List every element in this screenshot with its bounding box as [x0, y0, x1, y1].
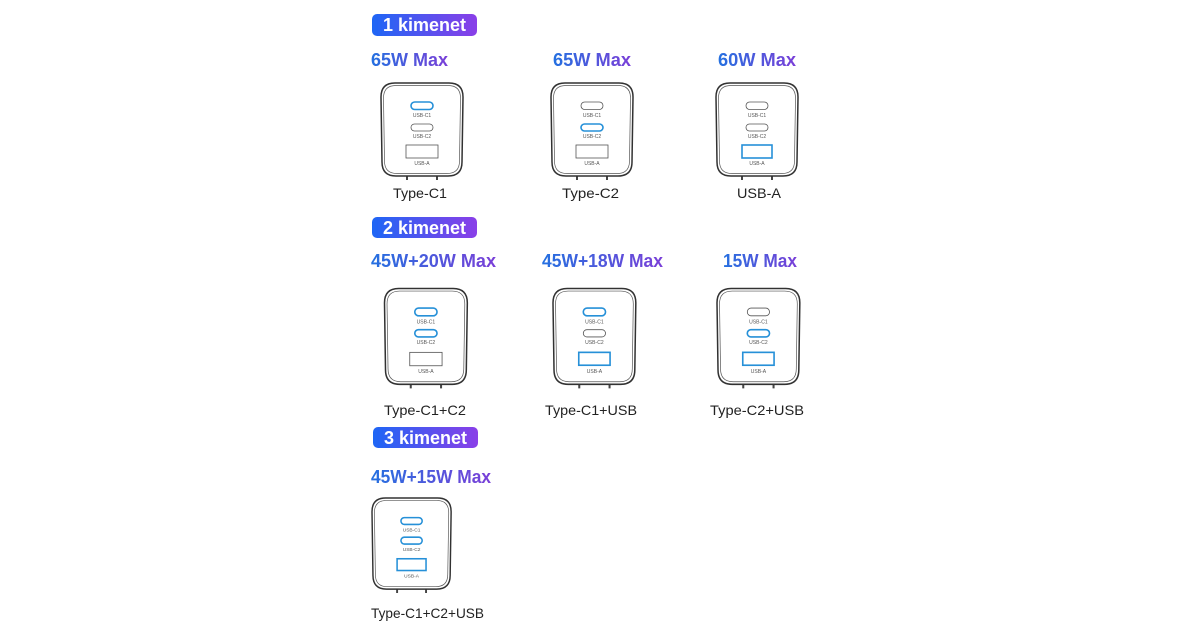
- charger icon: Type-C1+C2+USB: USB-A: [404, 573, 420, 579]
- charger icon: Type-C1: USB-C1: [413, 113, 431, 119]
- charger icon: USB-A: [716, 83, 798, 180]
- heading: 15W Max: 15W Max: [723, 251, 797, 271]
- label: Type-C1+C2: Type-C1+C2: [384, 402, 466, 418]
- charger icon: Type-C1+C2: USB-A: [418, 369, 434, 375]
- label: Type-C1+USB: Type-C1+USB: [545, 402, 637, 418]
- heading: 60W Max: 60W Max: [718, 50, 796, 70]
- charger icon: Type-C2: USB-C2: [583, 134, 601, 140]
- heading: 45W+20W Max: 45W+20W Max: [371, 251, 496, 271]
- charger icon: Type-C2+USB: USB-A: [751, 369, 767, 375]
- charger icon: Type-C1+C2+USB: USB-C1: [403, 527, 421, 533]
- label: Type-C1+C2+USB: Type-C1+C2+USB: [371, 605, 484, 621]
- charger icon: USB-A: USB-C2: [748, 134, 766, 140]
- charger icon: Type-C2+USB: USB-C1: [749, 319, 768, 326]
- badge: 3 kimenet: 3 kimenet: [384, 428, 467, 448]
- badge: 1 kimenet: 1 kimenet: [383, 15, 466, 35]
- charger icon: Type-C1+C2+USB: USB-C2: [403, 547, 421, 553]
- charger icon: Type-C1+C2+USB: [372, 498, 451, 593]
- charger icon: Type-C1+USB: USB-C2: [585, 340, 604, 346]
- charger icon: Type-C2: USB-A: [584, 161, 600, 167]
- charger icon: Type-C1+C2: USB-C2: [417, 340, 435, 346]
- charger icon: Type-C1: USB-A: [414, 161, 430, 167]
- heading: 65W Max (Type-C1): 65W Max: [371, 50, 448, 70]
- label: Type-C2: Type-C2: [562, 185, 619, 201]
- heading: 45W+18W Max: 45W+18W Max: [542, 251, 663, 271]
- charger icon: USB-A: USB-A: [749, 161, 765, 167]
- charger icon: Type-C1: [381, 83, 463, 180]
- label: Type-C2+USB: Type-C2+USB: [710, 402, 804, 418]
- charger icon: Type-C1+USB: USB-A: [587, 369, 603, 375]
- charger icon: Type-C2+USB: [717, 288, 800, 388]
- charger icon: Type-C1+C2: USB-C1: [417, 319, 435, 326]
- charger icon: Type-C1: USB-C2: [413, 134, 431, 140]
- charger icon: Type-C1+USB: USB-C1: [585, 319, 604, 326]
- charger icon: Type-C1+USB: [553, 288, 636, 388]
- charger icon: Type-C1+C2: [384, 288, 467, 388]
- heading: 65W Max (Type-C2): 65W Max: [553, 50, 631, 70]
- label: Type-C1: Type-C1: [393, 185, 447, 201]
- charger icon: USB-A: USB-C1: [748, 113, 766, 119]
- charger icon: Type-C2: USB-C1: [583, 113, 601, 119]
- heading: 45W+15W Max: 45W+15W Max: [371, 467, 491, 487]
- label: USB-A: USB-A: [737, 185, 782, 201]
- badge: 2 kimenet: 2 kimenet: [383, 218, 466, 238]
- charger icon: Type-C2+USB: USB-C2: [749, 340, 768, 346]
- charger icon: Type-C2: [551, 83, 633, 180]
